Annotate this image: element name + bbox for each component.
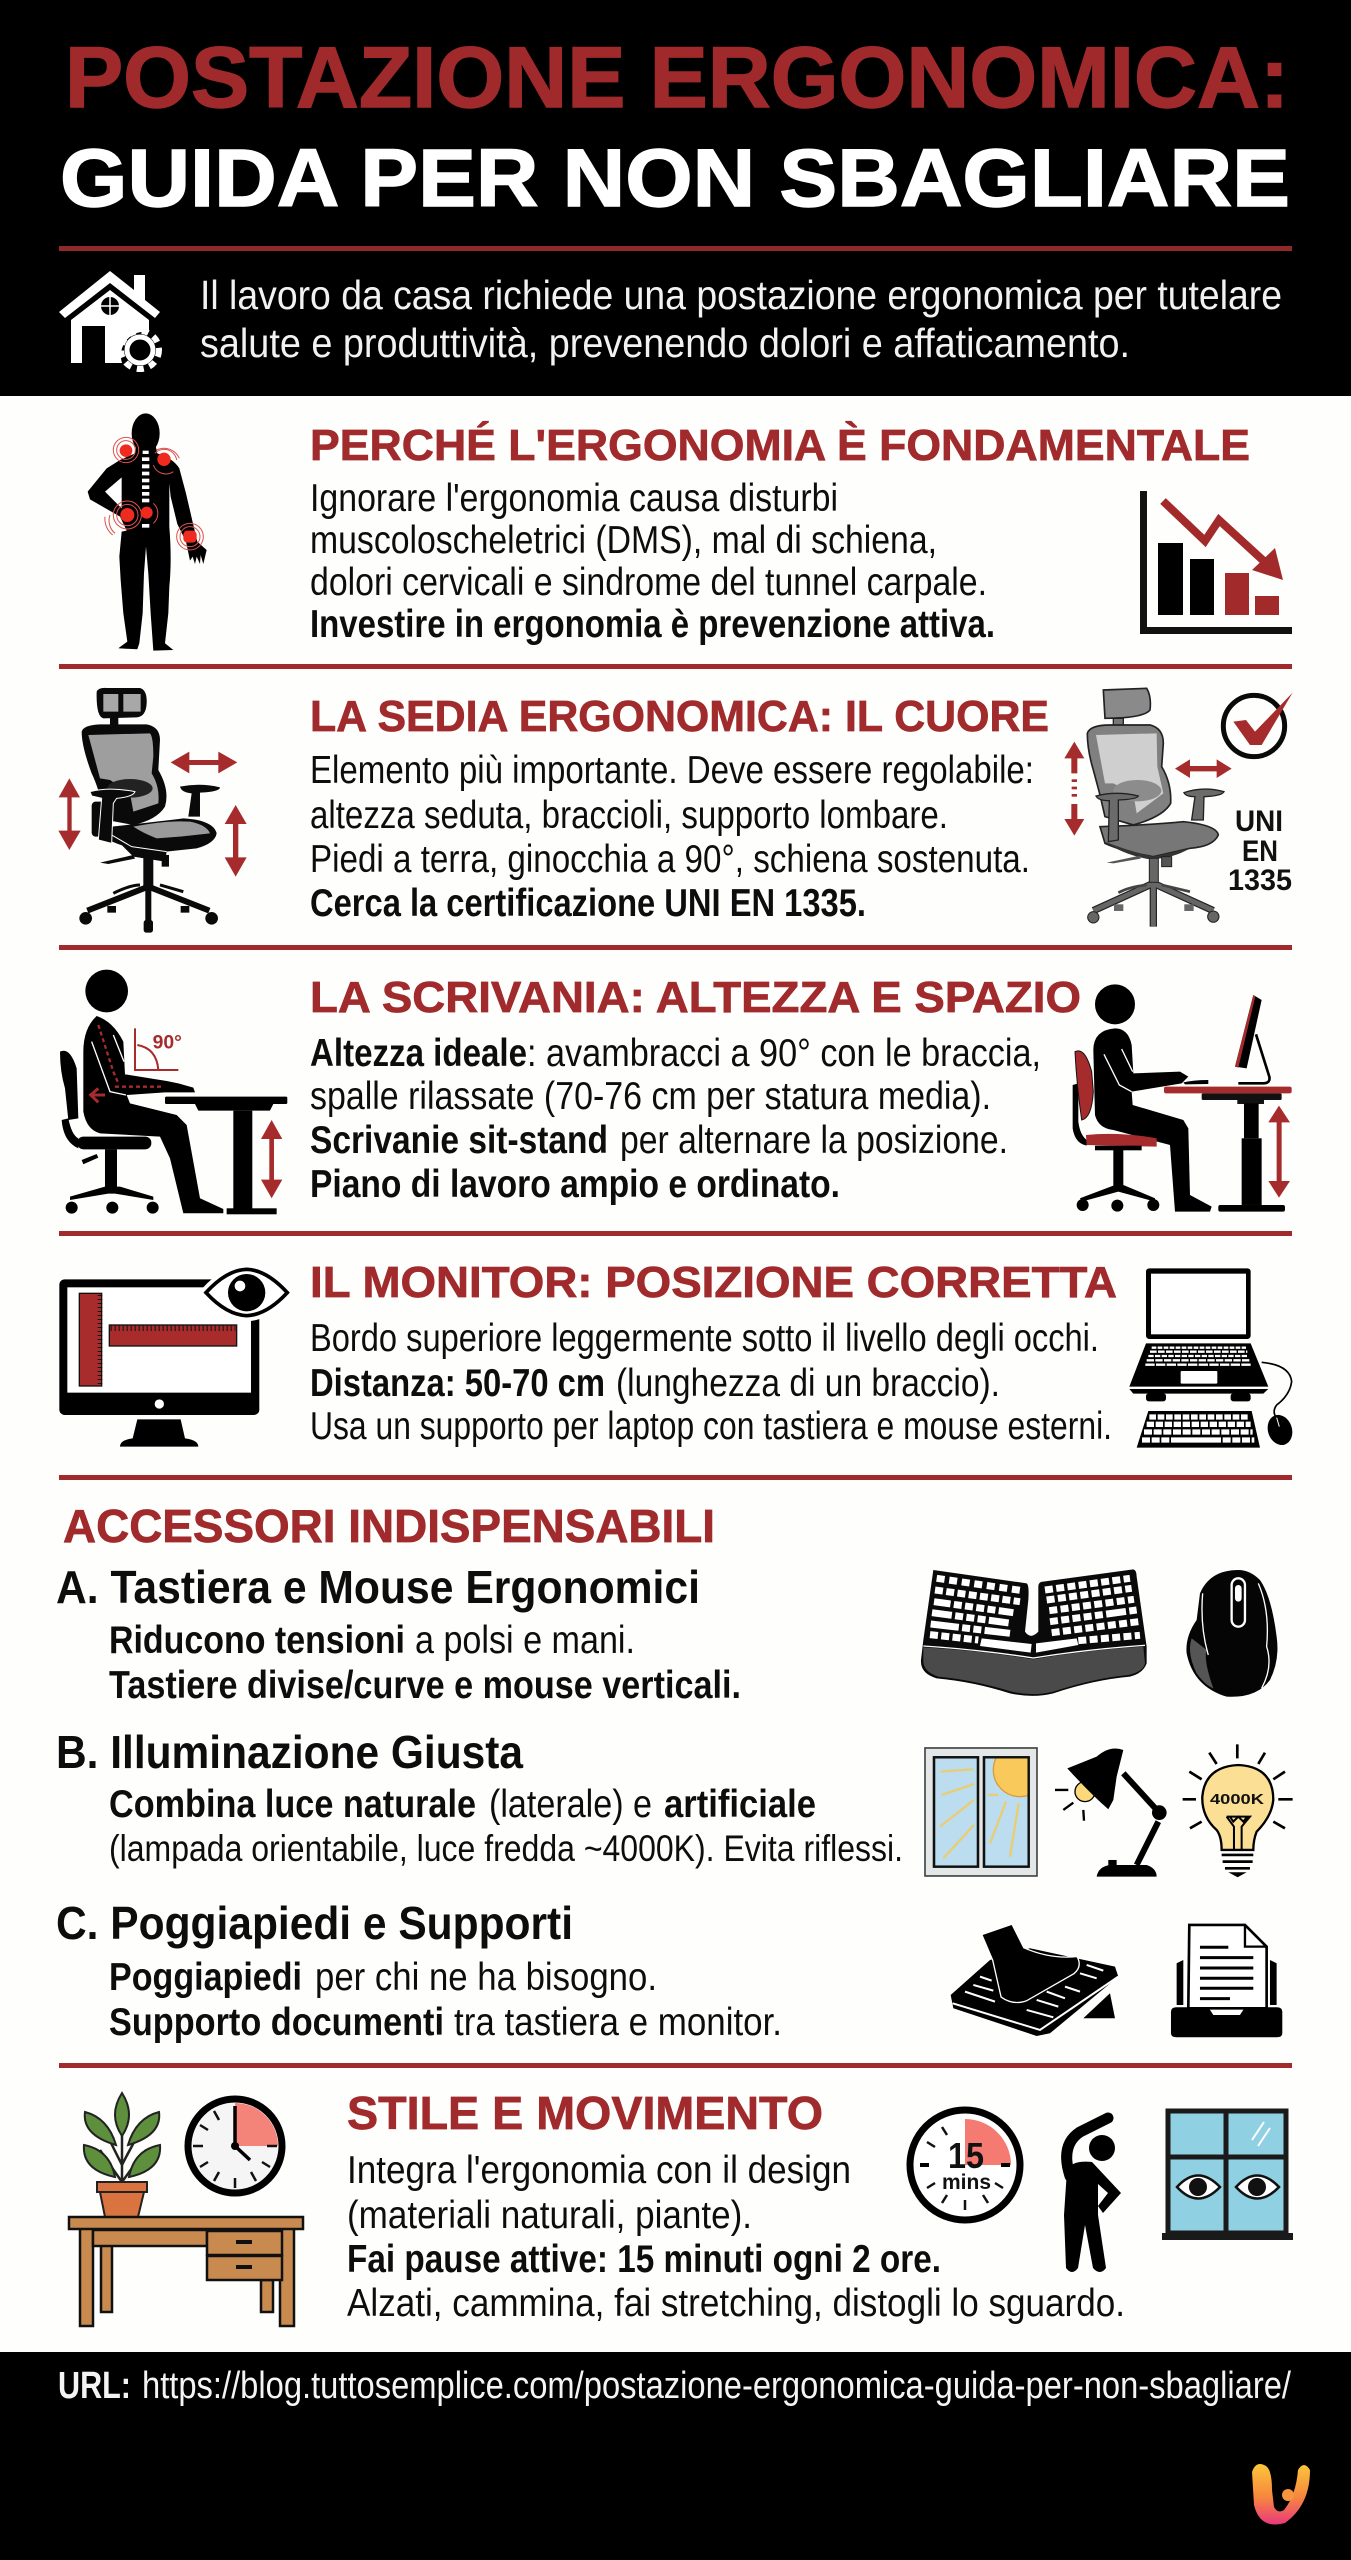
body text: Altezza ideale	[310, 1032, 527, 1075]
body text: : avambracci a 90° con le braccia,	[527, 1032, 1041, 1075]
body text	[310, 749, 1034, 925]
panel: essential accessories	[56, 1500, 1293, 2044]
body text: muscoloscheletrici (DMS), mal di schiena,	[310, 519, 937, 562]
title line 1: POSTAZIONE ERGONOMICA:	[65, 30, 1289, 126]
icon: clock	[188, 2099, 282, 2193]
body text: Alzati, cammina, fai stretching, distogli lo sguardo.	[347, 2282, 1125, 2325]
body text	[310, 1317, 1112, 1448]
heading: STILE E MOVIMENTO	[347, 2087, 823, 2139]
body text: Cerca la certificazione UNI EN 1335.	[310, 882, 866, 925]
panel: why ergonomics matters	[88, 413, 1292, 651]
icon: declining bar chart	[1140, 491, 1292, 634]
item C text: tra tastiera e monitor.	[454, 2001, 782, 2044]
item A text: Tastiere divise/curve e mouse verticali.	[109, 1664, 741, 1707]
body text: altezza seduta, braccioli, supporto lombare.	[310, 794, 948, 837]
body text: Bordo superiore leggermente sotto il livello degli occhi.	[310, 1317, 1099, 1360]
heading: LA SCRIVANIA: ALTEZZA E SPAZIO	[310, 973, 1081, 1022]
body text: Distanza: 50-70 cm	[310, 1362, 605, 1405]
body text: dolori cervicali e sindrome del tunnel carpale.	[310, 561, 987, 604]
item B text: Combina luce naturale	[109, 1783, 476, 1826]
icon: black mesh chair with arrows	[58, 688, 247, 933]
body text: Integra l'ergonomia con il design	[347, 2149, 851, 2192]
label: UNI EN 1335	[1228, 805, 1292, 897]
body text: Piedi a terra, ginocchia a 90°, schiena sostenuta.	[310, 838, 1030, 881]
logo	[1252, 2464, 1310, 2525]
body text: Investire in ergonomia è prevenzione attiva.	[310, 603, 995, 646]
body text: Elemento più importante. Deve essere regolabile:	[310, 749, 1034, 792]
icon: grey certified chair with check and label	[1064, 688, 1293, 927]
body text: Scrivanie sit-stand	[310, 1119, 608, 1162]
panel: monitor	[59, 1258, 1296, 1448]
header panel	[59, 30, 1292, 369]
item C text: per chi ne ha bisogno.	[315, 1956, 657, 1999]
icon: ergonomic keyboard	[921, 1569, 1147, 1696]
heading: PERCHÉ L'ERGONOMIA È FONDAMENTALE	[310, 420, 1250, 470]
label: UNI EN 1335: EN	[1242, 835, 1278, 868]
item A text: a polsi e mani.	[415, 1619, 635, 1662]
body text	[310, 477, 995, 646]
heading: ACCESSORI INDISPENSABILI	[63, 1500, 715, 1552]
icon: light bulb 4000K: 4000K	[1210, 1791, 1264, 1808]
icon: vertical mouse	[1186, 1570, 1277, 1697]
body text	[310, 1032, 1041, 1206]
body text: Fai pause attive: 15 minuti ogni 2 ore.	[347, 2238, 941, 2281]
icon: 15 minute timer	[910, 2110, 1020, 2220]
icon: laptop with external keyboard and mouse	[1129, 1268, 1296, 1448]
icon: desk lamp	[1055, 1748, 1167, 1877]
body text: per alternare la posizione.	[620, 1119, 1008, 1162]
intro text	[200, 272, 1282, 366]
icon: light bulb 4000K	[1183, 1744, 1293, 1877]
panel: desk	[60, 970, 1292, 1214]
item C text: Supporto documenti	[109, 2001, 444, 2044]
item C text: Poggiapiedi	[109, 1956, 302, 1999]
item B text: B. Illuminazione Giusta	[56, 1726, 523, 1778]
heading: LA SEDIA ERGONOMICA: IL CUORE	[310, 692, 1049, 741]
label: UNI EN 1335: 1335	[1228, 864, 1292, 897]
body text: (materiali naturali, piante).	[347, 2194, 752, 2237]
body text: spalle rilassate (70-76 cm per statura media).	[310, 1075, 991, 1118]
item B text	[56, 1726, 903, 1869]
icon: window with sun	[925, 1743, 1047, 1876]
item B text: artificiale	[664, 1783, 816, 1826]
heading: IL MONITOR: POSIZIONE CORRETTA	[310, 1258, 1117, 1307]
panel: ergonomic chair	[58, 688, 1293, 933]
body text: Usa un supporto per laptop con tastiera e mouse esterni.	[310, 1405, 1112, 1448]
item B text: (lampada orientabile, luce fredda ~4000K). Evita riflessi.	[109, 1828, 903, 1869]
item C text: C. Poggiapiedi e Supporti	[56, 1897, 573, 1949]
label: UNI EN 1335: UNI	[1235, 805, 1283, 838]
body text: (lunghezza di un braccio).	[616, 1362, 1000, 1405]
icon: seated worker at sit-stand desk	[1073, 984, 1292, 1212]
intro text: salute e produttività, prevenendo dolori e affaticamento.	[200, 320, 1130, 366]
icon: human body with pain points	[88, 413, 207, 651]
item C text	[56, 1897, 782, 2044]
icon: house with gear	[59, 271, 160, 369]
icon: stretching person	[1064, 2118, 1121, 2272]
body text: Ignorare l'ergonomia causa disturbi	[310, 477, 838, 520]
panel: style and movement	[69, 2087, 1293, 2326]
icon: 15 minute timer: 15	[948, 2135, 984, 2176]
body text	[347, 2149, 1125, 2325]
item A text: A. Tastiera e Mouse Ergonomici	[56, 1561, 700, 1613]
icon: footrest	[951, 1925, 1118, 2036]
footer URL: URL:	[58, 2365, 131, 2407]
icon: document holder	[1171, 1925, 1282, 2037]
item A text	[56, 1561, 741, 1707]
icon: seated posture with desk and 90 degree angle: 90°	[153, 1032, 182, 1053]
icon: window with eyes	[1162, 2109, 1293, 2240]
icon: monitor with rulers and eye	[59, 1269, 287, 1447]
item A text: Riducono tensioni	[109, 1619, 405, 1662]
accessory icons	[921, 1569, 1293, 2037]
icon: seated posture with desk and 90 degree angle	[60, 970, 287, 1214]
item B text: (laterale) e	[489, 1783, 652, 1826]
icon: 15 minute timer: mins	[942, 2171, 991, 2194]
title line 2: GUIDA PER NON SBAGLIARE	[60, 133, 1290, 224]
icon: desk with plant	[69, 2093, 303, 2326]
body text: Piano di lavoro ampio e ordinato.	[310, 1163, 840, 1206]
